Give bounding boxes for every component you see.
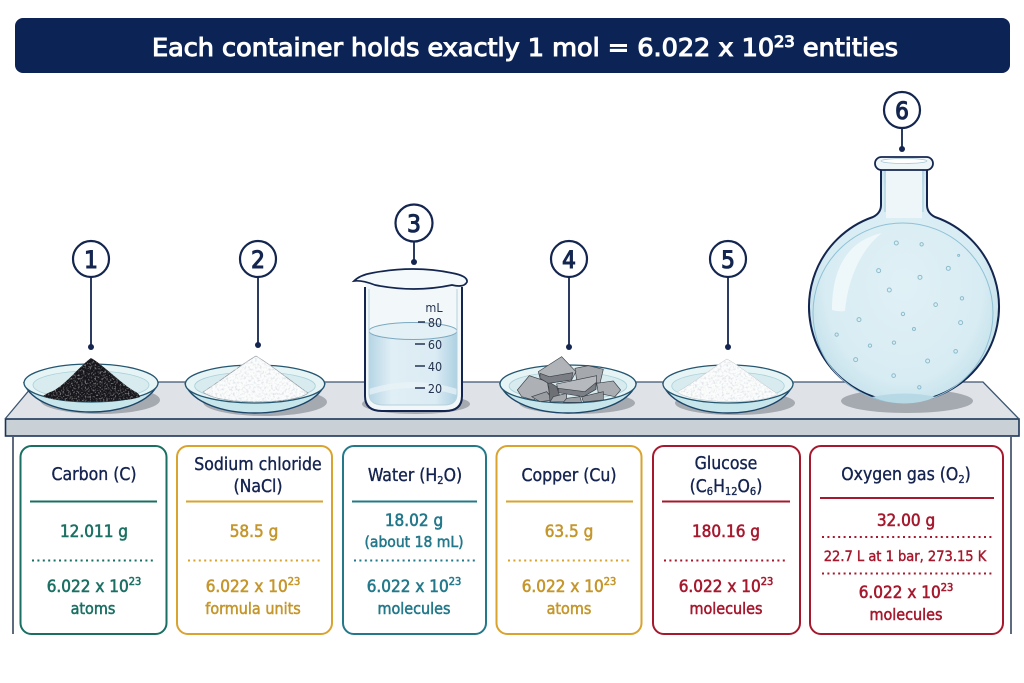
number marker 6 bbox=[884, 92, 920, 152]
panel: glucose: 6 bbox=[750, 485, 756, 498]
count: 23 bbox=[288, 575, 300, 588]
mass: 63.5 g bbox=[545, 522, 593, 542]
panel: glucose: O bbox=[738, 477, 750, 497]
title: entities bbox=[795, 33, 898, 62]
count: 23 bbox=[941, 581, 953, 594]
title banner bbox=[15, 18, 1010, 73]
count: 6.022 x 10 bbox=[522, 577, 604, 597]
number marker 6: 6 bbox=[895, 97, 909, 125]
item 6: round-bottom flask of oxygen bbox=[809, 157, 999, 413]
water bbox=[369, 330, 457, 405]
glucose pile bbox=[677, 359, 778, 402]
name: 2 bbox=[437, 474, 444, 487]
number marker 1 bbox=[73, 241, 109, 350]
item 1: carbon dish bbox=[24, 358, 160, 414]
name: Oxygen gas (O bbox=[841, 465, 958, 485]
name: Copper (Cu) bbox=[521, 466, 617, 486]
mass: 32.00 g bbox=[877, 511, 935, 531]
item 3: beaker of water: 20 bbox=[428, 381, 442, 396]
item 4: copper dish bbox=[500, 357, 636, 414]
item 3: beaker of water: 60 bbox=[428, 337, 442, 352]
panel: glucose: 6 bbox=[707, 485, 713, 498]
panel: water: (about 18 mL) bbox=[364, 533, 464, 551]
item 3: beaker of water bbox=[354, 269, 470, 414]
panel: sodium chloride bbox=[177, 446, 332, 634]
number marker 2: 2 bbox=[251, 246, 265, 274]
panel: glucose bbox=[653, 446, 800, 634]
number marker 1: 1 bbox=[84, 246, 98, 274]
panel: oxygen gas: molecules bbox=[869, 605, 943, 624]
panel: water bbox=[343, 446, 486, 634]
salt pile bbox=[203, 356, 308, 402]
number marker 3: 3 bbox=[407, 210, 421, 238]
name: Carbon (C) bbox=[51, 465, 137, 485]
panel: carbon: atoms bbox=[71, 599, 115, 618]
panel: oxygen gas bbox=[810, 446, 1003, 634]
flask lip bbox=[875, 157, 933, 170]
flask highlight bbox=[832, 233, 882, 311]
count: 6.022 x 10 bbox=[679, 577, 761, 597]
title: Each container holds exactly 1 mol = 6.022 x 10 bbox=[152, 33, 700, 62]
panel: copper bbox=[496, 446, 642, 634]
flask base liquid bbox=[872, 394, 936, 404]
panel: carbon bbox=[20, 446, 166, 634]
number marker 5: 5 bbox=[721, 246, 735, 274]
count: 23 bbox=[604, 575, 616, 588]
panel: sodium chloride: formula units bbox=[205, 599, 301, 618]
panel: glucose: ) bbox=[756, 477, 762, 497]
copper chunks bbox=[517, 357, 621, 402]
count: 6.022 x 10 bbox=[367, 577, 449, 597]
lab bench bbox=[5, 382, 1019, 634]
panel: water: molecules bbox=[377, 599, 451, 618]
item 5: glucose dish bbox=[663, 359, 795, 415]
panel: glucose: 12 bbox=[725, 485, 738, 498]
item 3: beaker of water: 40 bbox=[428, 359, 442, 374]
count: 6.022 x 10 bbox=[206, 577, 288, 597]
name: 2 bbox=[958, 473, 965, 486]
count: 6.022 x 10 bbox=[859, 583, 941, 603]
name: O) bbox=[444, 466, 462, 486]
gas molecules bbox=[835, 241, 964, 389]
panel: glucose: (C bbox=[690, 477, 707, 497]
mass: 58.5 g bbox=[230, 522, 278, 542]
item 2: sodium chloride dish bbox=[185, 356, 327, 416]
number marker 2 bbox=[240, 241, 276, 348]
number marker 5 bbox=[710, 241, 746, 350]
panel: glucose: molecules bbox=[689, 599, 763, 618]
panel: glucose: H bbox=[713, 477, 725, 497]
name: Sodium chloride bbox=[194, 455, 322, 475]
mass: 180.16 g bbox=[692, 522, 760, 542]
mass: 12.011 g bbox=[60, 522, 128, 542]
number marker 4 bbox=[551, 241, 587, 350]
count: 6.022 x 10 bbox=[47, 577, 129, 597]
panel: sodium chloride: (NaCl) bbox=[233, 477, 283, 497]
name: ) bbox=[965, 465, 971, 485]
number marker 4: 4 bbox=[562, 246, 576, 274]
item 3: beaker of water: mL bbox=[425, 300, 443, 315]
mass: 18.02 g bbox=[385, 511, 443, 531]
carbon pile bbox=[43, 358, 140, 402]
item 3: beaker of water: 80 bbox=[428, 315, 442, 330]
molar volume: 22.7 L at 1 bar, 273.15 K bbox=[824, 549, 987, 565]
count: 23 bbox=[129, 575, 141, 588]
count: 23 bbox=[761, 575, 773, 588]
title: 23 bbox=[774, 32, 795, 51]
name: Water (H bbox=[368, 466, 437, 486]
panel: copper: atoms bbox=[547, 599, 591, 618]
name: Glucose bbox=[695, 454, 757, 474]
count: 23 bbox=[449, 575, 461, 588]
number marker 3 bbox=[396, 204, 432, 265]
